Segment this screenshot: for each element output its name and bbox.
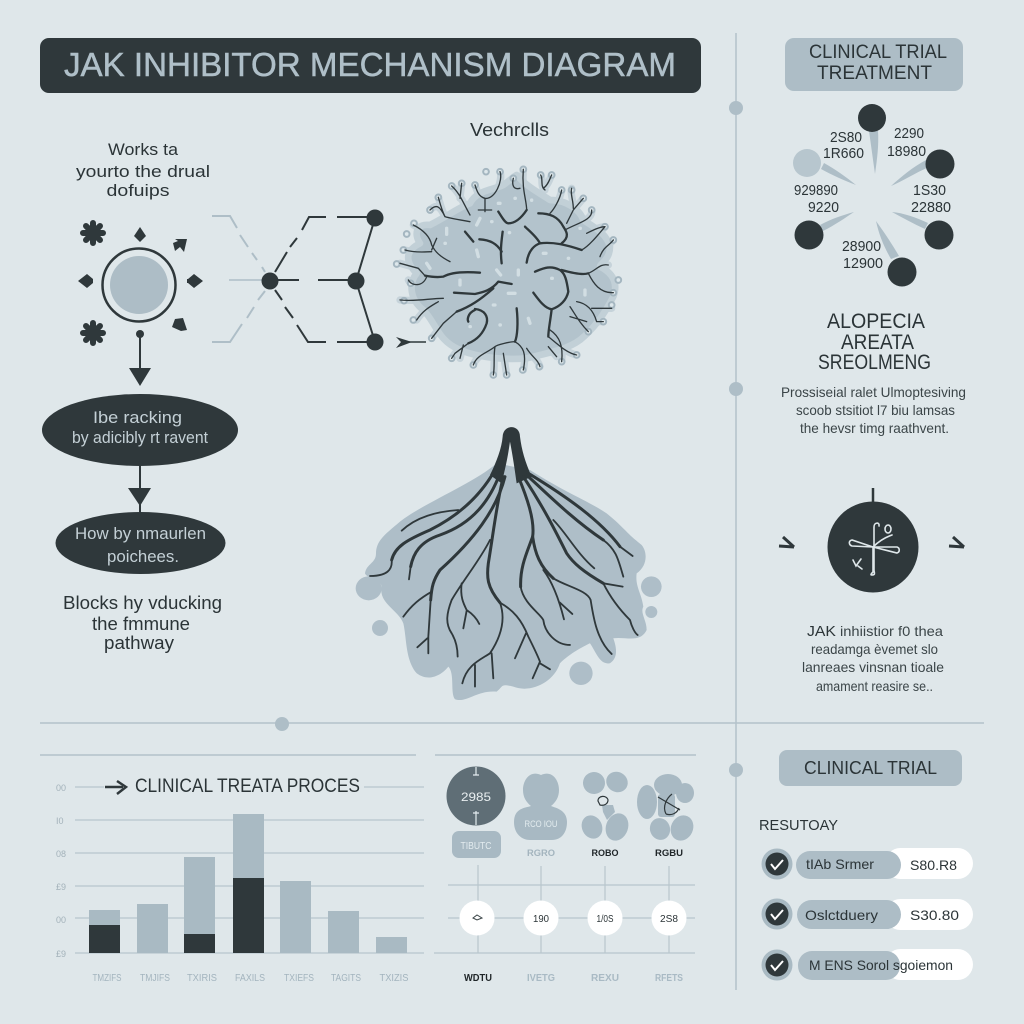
text block: alopecia description: scoob stsitiot l7 biu lamsas [796, 402, 955, 418]
text block: alopecia description: the hevsr timg raathvent. [800, 420, 949, 436]
icon: dark circle with cross molecule [828, 488, 918, 592]
flow node: blocking step: by adicibly rt ravent [72, 428, 208, 447]
stage one: dark circle and tag [446, 766, 506, 858]
bar chart: clinical process: TMJIFS [140, 973, 170, 984]
result row two: Oslctduery [805, 907, 878, 923]
stage four: petals with cross [637, 774, 697, 859]
bar chart: clinical process: 00 [56, 915, 66, 925]
process grid with value nodes: 2S8 [660, 914, 678, 925]
badge: clinical trial treatment: TREATMENT [817, 63, 932, 84]
text block: blocks pathway [63, 593, 222, 653]
text block: alopecia description [781, 384, 966, 436]
heading: clinical process: CLINICAL TREATA PROCES [135, 776, 360, 797]
radial chart: treatment values: 929890 [794, 182, 838, 199]
badge: clinical trial treatment [785, 38, 963, 91]
stage four: petals with cross: RGBU [655, 848, 683, 859]
text block: JAK inhibitor note: JAK inhiistior f0 thea [807, 623, 943, 640]
result row two: S30.80 [910, 907, 959, 923]
text block: JAK inhibitor note: amament reasire se.. [816, 678, 933, 694]
stage one: dark circle and tag: TIBUTC [460, 841, 492, 852]
result row two [762, 898, 973, 930]
title: JAK INHIBITOR MECHANISM DIAGRAM [64, 46, 676, 83]
stage three: petals [578, 768, 632, 859]
text block: works to: yourto the drual [76, 162, 210, 181]
title [40, 38, 701, 93]
badge: clinical trial: CLINICAL TRIAL [804, 758, 937, 778]
radial chart: treatment values: 18980 [887, 143, 926, 160]
process grid with value nodes: IVETG [527, 973, 555, 984]
bar chart: clinical process: TXIZIS [380, 973, 409, 984]
bar chart: clinical process: FAXILS [235, 973, 265, 984]
heading: alopecia areata: ALOPECIA [827, 310, 925, 333]
text block: JAK inhibitor note [802, 623, 944, 694]
result row one: tIAb Srmer [806, 856, 874, 872]
bar chart: clinical process: TXIRIS [187, 973, 217, 984]
radial chart: treatment values: 22880 [911, 199, 951, 216]
flow node: patches step: How by nmaurlen [75, 524, 206, 543]
bar chart: clinical process: TXIEFS [284, 973, 314, 984]
flow node: patches step: poichees. [107, 547, 179, 566]
process grid with value nodes [434, 865, 695, 984]
arrow into molecule [396, 337, 426, 348]
flow node: blocking step: Ibe racking [93, 408, 182, 427]
label: vechrclls: Vechrclls [470, 120, 549, 140]
illustration: branching immune cell [397, 169, 618, 375]
radial chart: treatment values: 1S30 [913, 182, 946, 199]
stage two: head shape: RCO IOU [524, 819, 558, 829]
network diagram [212, 210, 384, 350]
text block: JAK inhibitor note: lanreaes vinsnan tioale [802, 659, 944, 675]
radial chart: treatment values: 1R660 [823, 145, 864, 162]
radial chart: treatment values: 28900 [842, 238, 881, 255]
stage three: petals: ROBO [592, 848, 618, 859]
heading: alopecia areata: SREOLMENG [818, 351, 931, 374]
radial chart: treatment values: 9220 [808, 199, 839, 216]
result row one: S80.R8 [910, 857, 957, 873]
result row three [762, 949, 973, 980]
bar chart: clinical process: £9 [56, 949, 66, 959]
label: results today: RESUTOAY [759, 817, 838, 834]
bar chart: clinical process: I0 [56, 816, 64, 826]
radial chart: treatment values [793, 104, 954, 286]
radial chart: treatment values: 12900 [843, 255, 883, 272]
heading: alopecia areata [818, 310, 931, 374]
bar chart: clinical process: 08 [56, 849, 66, 859]
badge: clinical trial treatment: CLINICAL TRIAL [809, 42, 947, 63]
radial chart: treatment values: 2S80 [830, 129, 862, 146]
text block: blocks pathway: Blocks hy vducking [63, 593, 222, 613]
text block: works to [76, 140, 210, 200]
result row one [762, 848, 973, 880]
arrow: left of icon [779, 537, 794, 547]
bar chart: clinical process: TAGITS [331, 973, 361, 984]
process grid with value nodes: 1/0S [596, 914, 614, 925]
radial chart: treatment values: 2290 [894, 125, 924, 142]
process grid with value nodes: WDTU [464, 973, 492, 984]
bar chart: clinical process: £9 [56, 882, 66, 892]
stage one: dark circle and tag: 2985 [461, 790, 491, 804]
process grid with value nodes: REXU [591, 973, 619, 984]
bar chart: clinical process: 00 [56, 783, 66, 793]
bar chart: clinical process [56, 783, 424, 984]
text block: alopecia description: Prossiseial ralet Ulmoptesiving [781, 384, 966, 400]
arrow: down to next step [128, 465, 151, 512]
text block: blocks pathway: the fmmune [92, 614, 190, 634]
text block: works to: dofuips [106, 181, 170, 200]
heading: alopecia areata: AREATA [841, 331, 914, 354]
stage two: head shape: RGRO [527, 848, 555, 859]
text block: works to: Works ta [108, 140, 179, 159]
flow node: blocking step [42, 394, 238, 466]
text block: blocks pathway: pathway [104, 633, 174, 653]
result row three: M ENS Sorol sgoiemon [809, 957, 953, 973]
arrow: right of icon [949, 537, 964, 547]
process grid with value nodes: 190 [533, 914, 549, 925]
badge: clinical trial [779, 750, 962, 786]
text block: JAK inhibitor note: readamga èvemet slo [811, 641, 938, 657]
illustration: follicle root structure [356, 427, 662, 700]
bar chart: clinical process: TMZIFS [92, 973, 122, 984]
stage two: head shape [514, 774, 567, 859]
icon: receptor cell with arrows [78, 223, 203, 386]
process grid with value nodes: RFETS [655, 973, 683, 984]
flow node: patches step [56, 512, 226, 574]
